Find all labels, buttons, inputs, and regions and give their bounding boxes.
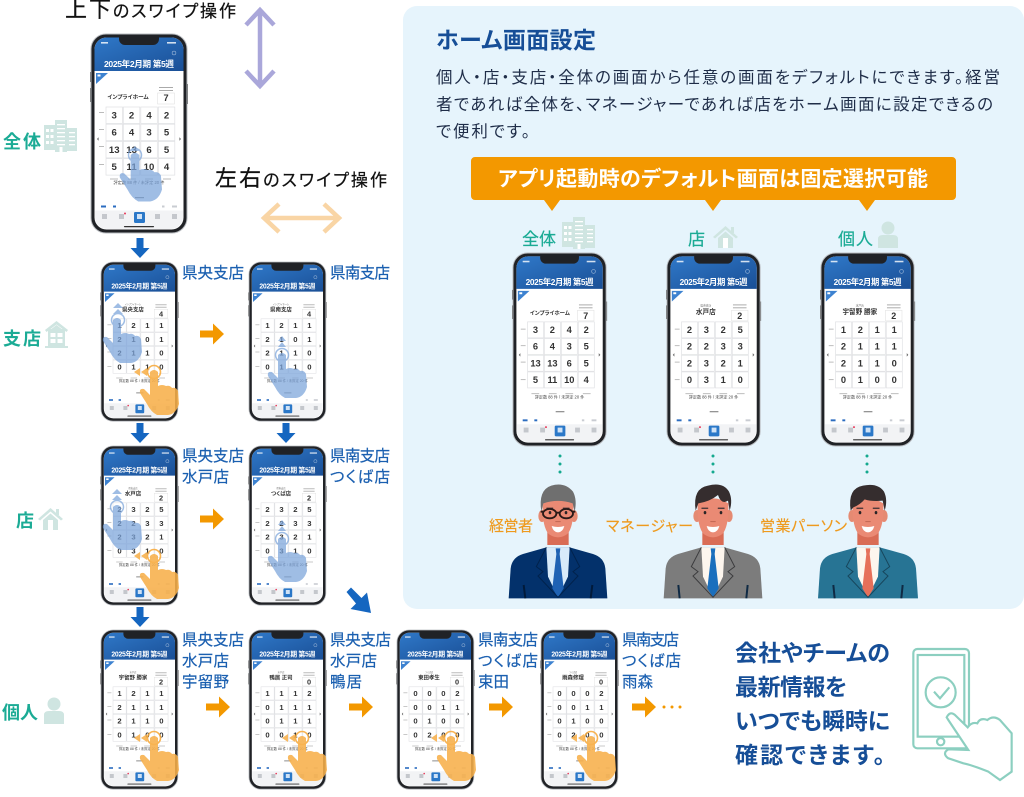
phone: つくば店: 2325 [265, 505, 312, 514]
phone: 水戸店: 評定数 88 件 / 未評定 20 件 [119, 562, 160, 567]
phone: panel shop: 2 [737, 311, 742, 321]
phone: panel individual: 評定数 88 件 / 未評定 20 件 [843, 393, 892, 399]
label: all company: 全体 [3, 132, 41, 152]
text block: closing message [735, 640, 890, 768]
phone: panel shop: 2025年2月期 第5週 [680, 277, 748, 287]
phone: all company swipe [90, 34, 188, 233]
phone: all company swipe: 11 [127, 162, 137, 173]
phone: 鴨居: 2025年2月期 第5週 [259, 649, 316, 658]
arrows: orange right [200, 324, 682, 718]
label: executive: 経営者 [489, 518, 533, 535]
phone: つくば店: 2233 [265, 519, 312, 528]
phone: 宇留野: 評定数 88 件 / 未評定 20 件 [119, 746, 160, 751]
label: individual (panel) [838, 222, 898, 249]
phone: all company swipe: 13 [109, 145, 120, 156]
phone: 県央支店: インプライホーム [125, 302, 142, 306]
phone: 県南支店 [248, 262, 327, 421]
phone: 雨森: 0011 [557, 703, 604, 712]
text block: closing message: 最新情報を [735, 674, 847, 700]
phone: 県南支店: 0110 [265, 362, 312, 371]
text block: description: 者であれば全体を、マネージャーであれば店をホーム画面に設定できるの [436, 95, 993, 114]
phone: 県央支店: 2110 [117, 349, 164, 358]
labels: 県南支店 つくば店 [330, 447, 390, 486]
phone: panel all company: 6435 [533, 342, 589, 352]
phone: panel individual: 水戸店 [856, 303, 864, 307]
phone: 県南支店: 4 [307, 309, 312, 318]
phone: つくば店: 2025年2月期 第5週 [259, 465, 316, 474]
label: all company (panel): 全体 [522, 230, 556, 249]
phone: panel all company: 13 [530, 358, 541, 368]
phone: 鴨居: 鴨居 正司 [269, 674, 293, 682]
labels: 鴨居: 鴨居 [330, 673, 362, 691]
label: branch: 支店 [3, 329, 41, 349]
phone: 鴨居: 0111 [265, 717, 312, 726]
phone: 宇留野 [100, 630, 179, 789]
phone: 県南支店: 評定数 88 件 / 未評定 20 件 [267, 378, 308, 383]
phone: panel all company: 4 [584, 375, 590, 385]
arrow: horizontal swipe [264, 204, 339, 232]
labels: 宇留野: 水戸店 [182, 652, 229, 670]
phone: 水戸店: 2321 [117, 533, 164, 542]
phone: panel individual: 0100 [841, 375, 897, 385]
label: shop [16, 508, 63, 531]
phone: panel all company: 評定数 88 件 / 未評定 20 件 [535, 393, 584, 399]
text block: closing message: いつでも瞬時に [735, 708, 890, 734]
label: shop (panel) [688, 226, 738, 249]
phone: 雨森 [540, 630, 619, 789]
phone: 束田: 0100 [413, 717, 460, 726]
phone: 県央支店: 2101 [117, 335, 164, 344]
text block: description: 個人・店・支店・全体の画面から任意の画面をデフォルトにできます。経営 [436, 67, 1000, 87]
phone: all company swipe: 10 [144, 162, 154, 173]
arrow: down from all [130, 238, 150, 258]
icon: blue swipe hand [120, 146, 162, 201]
phone: 鴨居: 水戸店 [278, 670, 285, 674]
panel: home screen settings background [403, 6, 1024, 609]
callout banner [471, 157, 956, 211]
phone: panel shop: 2325 [687, 325, 743, 335]
labels: 県央支店 水戸店 [182, 447, 244, 486]
phone: 束田: 0002 [413, 689, 460, 698]
phone: 鴨居: 0 [307, 677, 311, 686]
phone: panel individual: 2111 [841, 342, 897, 352]
labels: 県央支店: 県央支店 [182, 264, 244, 282]
phone: 雨森: 0200 [557, 730, 604, 739]
labels: 雨森: 県南支店 [622, 631, 679, 649]
phone: 水戸店: 2325 [117, 505, 164, 514]
arrows: blue down [130, 423, 371, 627]
phone: panel shop: 0310 [687, 375, 743, 385]
phone: 雨森: 雨森修理 [562, 674, 584, 682]
labels: 束田: 束田 [478, 673, 509, 691]
phone: panel all company [512, 253, 607, 446]
text block: closing message: 会社やチームの [735, 640, 890, 666]
phone: 雨森: 評定数 88 件 / 未評定 20 件 [559, 746, 600, 751]
labels: 束田: つくば店 [478, 652, 538, 670]
labels: 雨森: つくば店 [622, 652, 681, 670]
phone: panel all company: 5 [584, 358, 589, 368]
phone: 県南支店: 2101 [265, 335, 312, 344]
phone: つくば店 [248, 446, 327, 605]
phone: panel all company: 6 [567, 358, 572, 368]
phone: all company swipe: 3242 [112, 110, 169, 122]
phone: panel individual: 宇留野 勝家 [842, 307, 878, 316]
labels: 鴨居 [330, 631, 391, 691]
labels: 県南支店 つくば店: 県南支店 [330, 447, 390, 465]
phone: all company swipe: 2025年2月期 第5週 [104, 58, 174, 69]
labels: 雨森 [622, 631, 681, 691]
phone: all company swipe: インプライホーム [107, 94, 149, 101]
text block: description [436, 67, 1000, 141]
phone: all company swipe: 7 [163, 93, 169, 103]
phone: 水戸店: 水戸店 [125, 490, 142, 498]
person: executive [509, 485, 607, 598]
label: all company (panel) [522, 217, 595, 249]
phone: 県南支店: 2025年2月期 第5週 [259, 281, 316, 290]
phone: panel shop: 2233 [687, 342, 743, 352]
phone: つくば店: 0310 [265, 546, 312, 555]
heading: horizontal swipe: 左右のスワイプ操作 [215, 166, 387, 191]
labels: 束田 [478, 631, 538, 691]
phone: panel all company: インプライホーム [530, 310, 571, 317]
phone: all company swipe: 5 [112, 162, 118, 173]
label: shop (panel): 店 [688, 230, 705, 249]
phone: つくば店: 評定数 88 件 / 未評定 20 件 [267, 562, 308, 567]
phone: 宇留野: 2111 [117, 703, 164, 712]
label: sales: 営業パーソン [760, 518, 847, 535]
phone: 県央支店: 評定数 88 件 / 未評定 20 件 [119, 378, 160, 383]
label: all company [3, 120, 77, 152]
labels: 雨森: 雨森 [622, 673, 653, 691]
text block: closing message: 確認できます。 [735, 742, 885, 768]
phone: 水戸店: 0310 [117, 546, 164, 555]
labels: 束田: 県南支店 [478, 631, 538, 649]
phone: panel all company: 3242 [533, 325, 589, 335]
callout banner: アプリ起動時のデフォルト画面は固定選択可能 [498, 167, 928, 191]
phone: 雨森: 0100 [557, 717, 604, 726]
phone: panel shop: 水戸店 [696, 307, 716, 316]
phone: panel shop: 評定数 88 件 / 未評定 20 件 [689, 393, 738, 399]
phone: all company swipe: 5 [164, 145, 170, 156]
phone: 束田: 0 [455, 677, 459, 686]
phone: 鴨居: 1112 [265, 689, 312, 698]
icons: orange swipe hands [134, 366, 616, 781]
labels: 県南支店: 県南支店 [330, 264, 390, 282]
phone: panel shop [666, 253, 761, 446]
phone: panel all company: 10 [564, 375, 574, 385]
phone: all company swipe: 13 [126, 145, 137, 156]
label: branch [3, 321, 68, 349]
phone: 県央支店: 県央支店 [122, 306, 144, 314]
phone: panel individual: 2110 [841, 358, 897, 368]
label: manager: マネージャー [606, 518, 693, 535]
labels: 県央支店 水戸店: 水戸店 [182, 468, 229, 486]
phone: panel individual: 1211 [841, 325, 897, 335]
phone: panel all company: 11 [547, 375, 557, 385]
phone: 水戸店: 2 [159, 493, 163, 502]
phone: panel all company: 5 [533, 375, 538, 385]
phone: 束田: つくば店 [425, 670, 434, 674]
phone: 水戸店: 2233 [117, 519, 164, 528]
label: shop: 店 [16, 511, 34, 531]
phone: 束田: 2025年2月期 第5週 [407, 649, 464, 658]
phone: つくば店: 2 [307, 493, 311, 502]
labels: 県央支店 水戸店: 県央支店 [182, 447, 244, 465]
heading: home screen settings: ホーム画面設定 [436, 27, 596, 53]
labels: 宇留野 [182, 631, 244, 691]
phone: all company swipe: 4 [164, 162, 170, 173]
text block: description: で便利です。 [436, 122, 530, 141]
dots: connectors [558, 454, 868, 474]
phone: 雨森: 0002 [557, 689, 604, 698]
phone: 水戸店 [100, 446, 179, 605]
labels: 県南支店 つくば店: つくば店 [330, 468, 390, 486]
phone: 水戸店: 2025年2月期 第5週 [111, 465, 168, 474]
phone: 県央支店: 1211 [117, 321, 164, 330]
phone: panel shop: 県央支店 [700, 303, 711, 307]
phone: all company swipe: 6 [146, 145, 152, 156]
phone: つくば店: 2321 [265, 533, 312, 542]
label: individual: 個人 [2, 703, 38, 723]
phone: つくば店: 県南支店 [277, 486, 286, 490]
phone: つくば店: つくば店 [271, 490, 292, 498]
person: sales [818, 485, 918, 598]
labels: 鴨居: 水戸店 [330, 652, 377, 670]
phone: 水戸店: 県央支店 [129, 486, 138, 490]
phone: 束田 [396, 630, 475, 789]
phone: 県南支店: インプライホーム [273, 302, 290, 306]
phone: 宇留野: 水戸店 [130, 670, 137, 674]
person: manager [664, 485, 762, 598]
phone: 宇留野: 宇留野 勝家 [119, 674, 148, 682]
phone: 県央支店: 4 [159, 309, 164, 318]
phone: 束田: 評定数 88 件 / 未評定 20 件 [415, 746, 456, 751]
arrow: vertical swipe [246, 10, 274, 86]
phone: 束田: 0200 [413, 730, 460, 739]
phone: 鴨居: 0111 [265, 703, 312, 712]
phone: 雨森: つくば店 [569, 670, 578, 674]
phone: panel all company: 7 [583, 311, 588, 321]
phone: 県南支店: 2110 [265, 349, 312, 358]
phone: 宇留野: 0100 [117, 730, 164, 739]
phone: 鴨居: 評定数 88 件 / 未評定 20 件 [267, 746, 308, 751]
labels: 宇留野: 県央支店 [182, 631, 244, 649]
phone: 県南支店: 県南支店 [270, 306, 292, 314]
phone: all company swipe: 6435 [112, 128, 170, 139]
labels: 鴨居: 県央支店 [330, 631, 391, 649]
phone: all company swipe: 評定数 88 件 / 未評定 20 件 [114, 179, 164, 186]
phone: panel individual: 2 [891, 311, 896, 321]
phone: panel all company: 13 [547, 358, 558, 368]
phone: 雨森: 0 [599, 677, 603, 686]
phone: panel shop: 2321 [687, 358, 743, 368]
icon: hand tapping phone [913, 649, 1012, 780]
phone: 宇留野: 2025年2月期 第5週 [111, 649, 168, 658]
icons: blue swipe hands on left phones [103, 303, 307, 582]
phone: 鴨居 [248, 630, 327, 789]
phone: 鴨居: 0010 [265, 730, 312, 739]
phone: 束田: 0011 [413, 703, 460, 712]
label: individual [2, 698, 64, 724]
phone: 宇留野: 1211 [117, 689, 164, 698]
phone: 県央支店: 2025年2月期 第5週 [111, 281, 168, 290]
phone: 宇留野: 2110 [117, 717, 164, 726]
phone: panel individual: 2025年2月期 第5週 [834, 277, 902, 287]
phone: 県央支店 [100, 262, 179, 421]
phone: 宇留野: 2 [159, 677, 163, 686]
phone: panel all company: 2025年2月期 第5週 [526, 277, 594, 287]
phone: 束田: 束田孝生 [418, 674, 440, 682]
phone: 県南支店: 1211 [265, 321, 312, 330]
phone: panel individual [820, 253, 915, 446]
labels: 宇留野: 宇留野 [182, 673, 229, 691]
phone: 雨森: 2025年2月期 第5週 [551, 649, 608, 658]
phone: 県央支店: 0110 [117, 362, 164, 371]
label: individual (panel): 個人 [838, 230, 873, 249]
